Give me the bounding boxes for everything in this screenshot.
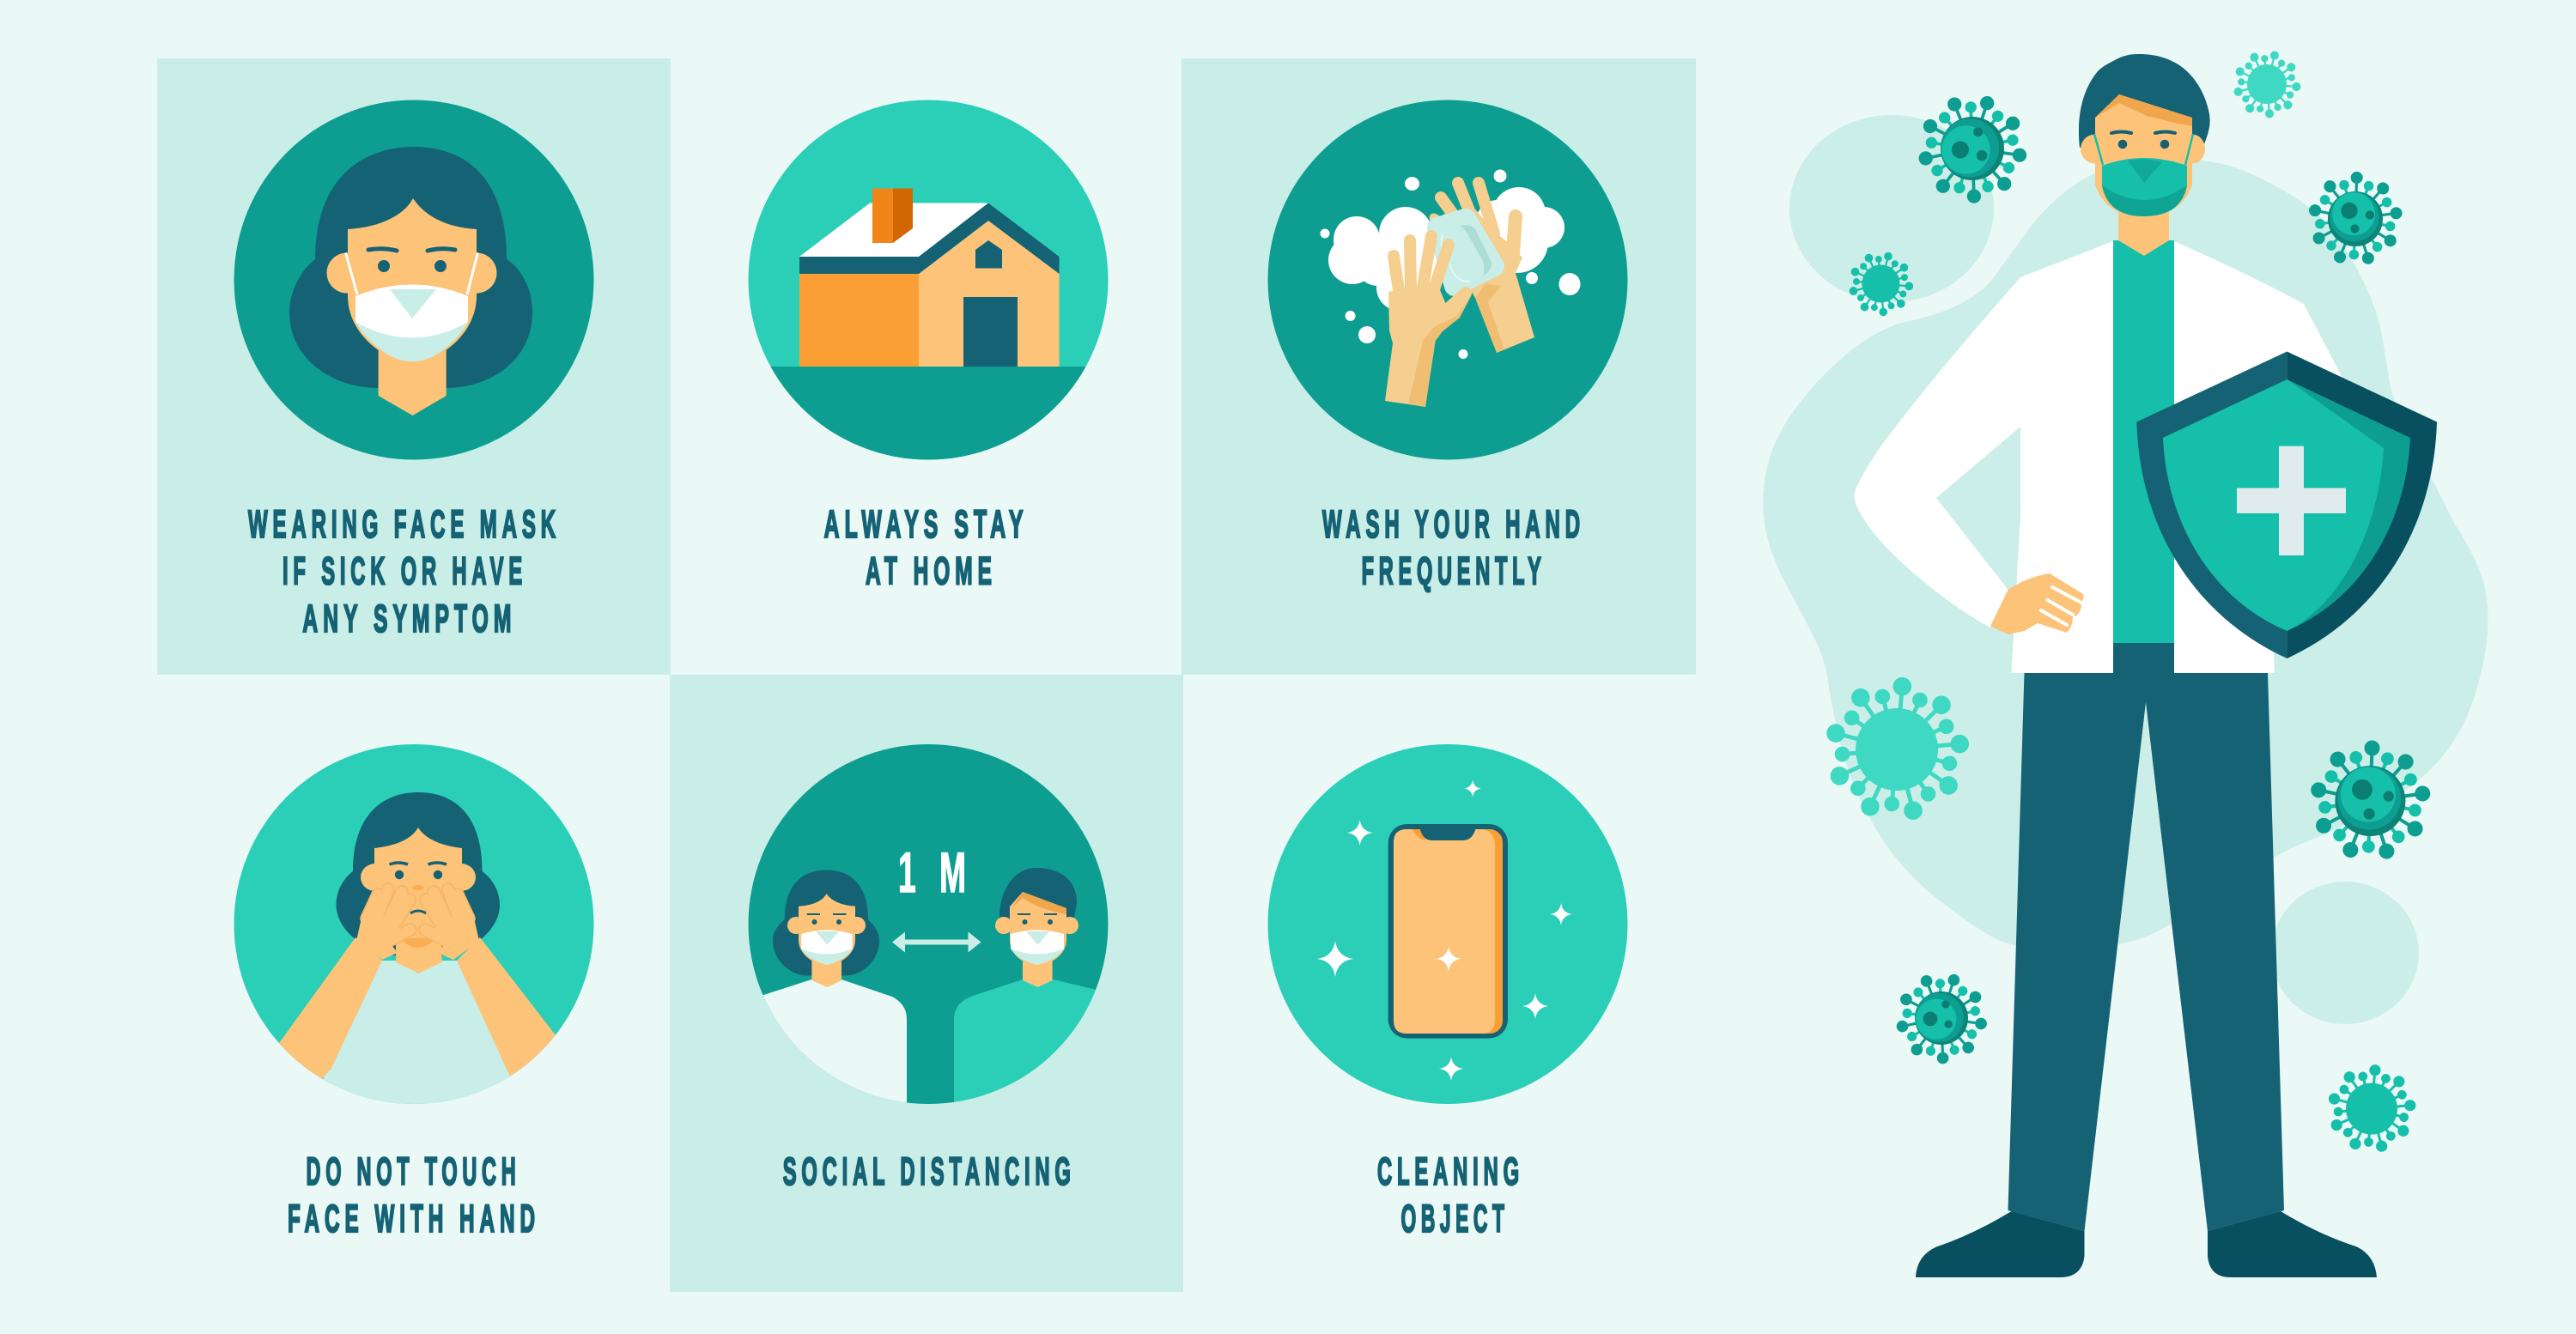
text: wash your hand [1322,502,1585,593]
text: one metre: 1 M [898,840,966,904]
arrow: distance [892,932,981,953]
virus: dark right [2305,166,2409,271]
text: always stay at home: AT HOME [866,549,997,593]
text: social distancing: SOCIAL DISTANCING [783,1149,1076,1193]
text: wearing face mask: IF SICK OR HAVE [283,549,527,593]
eyes [2118,140,2169,149]
doctor figure [1854,54,2437,1277]
text: cleaning object: CLEANING [1377,1149,1524,1193]
virus: big light left [1822,672,1975,827]
virus: teal lower right [2326,1061,2420,1156]
panel: wash your hand [1182,58,1696,675]
virus: light top right [2232,48,2304,120]
panel: wearing face mask [157,58,671,675]
text: wearing face mask: ANY SYMPTOM [302,597,516,640]
virus: small teal left [1847,249,1916,318]
neck [2118,193,2169,256]
virus: dark right lower [2306,733,2439,868]
text: always stay at home [824,502,1029,593]
background blobs [1763,115,2488,1024]
text: do not touch face: DO NOT TOUCH [306,1149,520,1193]
panel: do not touch face [234,744,594,1240]
shoes [1916,1211,2377,1277]
icon: woman touching face [234,744,594,1116]
hand [1990,573,2083,634]
icon: clean phone with sparkles [1267,744,1628,1104]
text: cleaning object [1377,1149,1524,1240]
icon: two people at one metre [738,744,1108,1116]
soap [1437,219,1494,286]
text: wash your hand: FREQUENTLY [1362,549,1546,593]
hair [2079,54,2210,148]
panel: social distancing [670,675,1183,1292]
icon: woman with face mask [234,100,594,460]
icon: washing hands with soap [1267,100,1628,460]
text: always stay at home: ALWAYS STAY [824,502,1029,546]
text: do not touch face [288,1149,540,1240]
woman [773,870,879,987]
panel: cleaning object [1267,744,1628,1240]
panel: always stay at home [738,100,1116,593]
icon: house [738,100,1116,470]
virus: dark top left [1914,88,2034,209]
virus: dark lower left [1893,967,1993,1070]
text: wearing face mask: WEARING FACE MASK [248,502,561,546]
face [2095,94,2192,216]
man [995,868,1078,987]
text: cleaning object: OBJECT [1401,1197,1510,1240]
surgical mask [2094,134,2193,216]
text: wearing face mask [248,502,561,640]
shield [2136,352,2437,658]
trousers [2008,673,2284,1231]
text: do not touch face: FACE WITH HAND [288,1197,540,1240]
text: wash your hand: WASH YOUR HAND [1322,502,1585,546]
lab coat [1854,241,2343,673]
scrubs [2113,240,2174,643]
ears [2081,134,2205,163]
